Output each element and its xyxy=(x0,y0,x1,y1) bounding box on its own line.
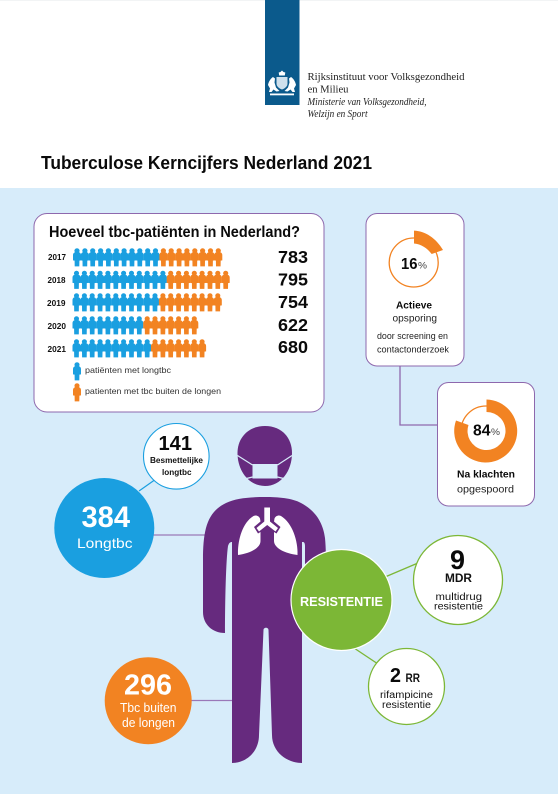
callout: resistentie xyxy=(291,550,392,650)
callout: 9 MDR: 9 xyxy=(450,545,465,575)
callout: 384 longtbc: 384 xyxy=(82,501,130,534)
callout: 296 tbc buiten de longen: de longen xyxy=(122,716,175,730)
callout: 141 besmettelijke longtbc: Besmettelijke xyxy=(150,456,204,465)
panel text: contactonderzoek xyxy=(377,344,449,356)
row 2019 xyxy=(47,292,308,312)
head with mask xyxy=(238,426,292,486)
connector lines from figure xyxy=(152,535,233,700)
logo text: institute names: Ministerie van Volksgezondheid, xyxy=(307,97,426,108)
row 2019: 2019 xyxy=(47,298,66,308)
callout: 2 RR xyxy=(368,648,444,724)
row 2020: 622 xyxy=(278,315,308,335)
logo: Rijksoverheid blue ribbon with coat of arms xyxy=(265,0,300,105)
panel: actieve opsporing xyxy=(366,214,464,366)
callout: 141 besmettelijke longtbc: longtbc xyxy=(162,468,192,477)
panel text: opsporing xyxy=(392,312,437,324)
callout: 9 MDR: resistentie xyxy=(434,602,483,612)
logo text: institute names: Welzijn en Sport xyxy=(308,109,368,120)
panel text xyxy=(457,468,515,496)
row 2021: 680 xyxy=(278,337,308,357)
body xyxy=(203,497,326,763)
callout: 2 RR: rifampicine xyxy=(380,690,433,701)
row 2020: 2020 xyxy=(48,321,66,331)
panel text xyxy=(377,300,449,356)
panel heading: Hoeveel tbc-patiënten in Nederland? xyxy=(49,224,300,241)
row 2017 xyxy=(48,247,308,267)
callout: 384 longtbc xyxy=(54,478,154,578)
panel text: opgespoord xyxy=(457,484,514,496)
logo text: institute names: Rijksinstituut voor Volksgezondheid xyxy=(308,72,464,83)
panel text: door screening en xyxy=(377,331,448,342)
callout: 384 longtbc: Longtbc xyxy=(77,535,132,551)
legend: patiënten met longtbc xyxy=(85,365,172,375)
callout: 2 RR: 2 xyxy=(390,665,401,687)
callout: 9 MDR: multidrug xyxy=(436,592,482,603)
panel text: Actieve xyxy=(396,300,432,312)
panel: patient counts per year xyxy=(34,214,324,412)
callout: 9 MDR: MDR xyxy=(445,573,473,585)
row 2018: 2018 xyxy=(48,275,66,285)
donut: 16 percent: % xyxy=(418,260,428,272)
logo text: institute names xyxy=(307,72,464,120)
title: Tuberculose Kerncijfers Nederland 2021 xyxy=(41,152,372,173)
connector: longtbc to besmettelijk xyxy=(139,479,156,491)
icon: coat of arms xyxy=(268,70,296,95)
panel text: Na klachten xyxy=(457,468,515,480)
callout: 2 RR: resistentie xyxy=(382,700,431,711)
figure: person with mask xyxy=(203,426,326,763)
row 2019: 754 xyxy=(278,292,308,312)
donut: 84 percent: 84 xyxy=(473,422,491,440)
row 2021: 2021 xyxy=(48,344,66,354)
callout: 141 besmettelijke longtbc: 141 xyxy=(158,433,192,455)
row 2018 xyxy=(48,270,308,290)
donut: 84 percent: % xyxy=(491,427,501,438)
legend xyxy=(73,362,221,401)
row 2020 xyxy=(48,315,308,335)
row 2017: 2017 xyxy=(48,252,66,262)
donut: 16 percent: 16 xyxy=(401,256,418,273)
icon: lungs xyxy=(238,508,298,555)
callout: 296 tbc buiten de longen: Tbc buiten xyxy=(120,701,177,715)
connector between detection panels xyxy=(400,366,437,425)
donut: 16 percent xyxy=(389,231,443,287)
panel: na klachten opgespoord xyxy=(438,382,534,506)
callout: 296 tbc buiten de longen xyxy=(105,657,192,744)
callout: resistentie: RESISTENTIE xyxy=(300,594,383,609)
logo text: institute names: en Milieu xyxy=(308,84,348,96)
legend: patienten met tbc buiten de longen xyxy=(85,386,221,396)
callout: 296 tbc buiten de longen: 296 xyxy=(124,670,172,702)
row 2021 xyxy=(48,337,308,357)
callout: 9 MDR xyxy=(414,536,502,624)
donut: 84 percent xyxy=(454,400,517,462)
callout: 141 besmettelijke longtbc xyxy=(144,424,209,489)
row 2018: 795 xyxy=(278,270,308,290)
callout: 2 RR: RR xyxy=(406,673,421,685)
row 2017: 783 xyxy=(278,247,308,267)
connector lines: resistentie xyxy=(354,563,418,664)
